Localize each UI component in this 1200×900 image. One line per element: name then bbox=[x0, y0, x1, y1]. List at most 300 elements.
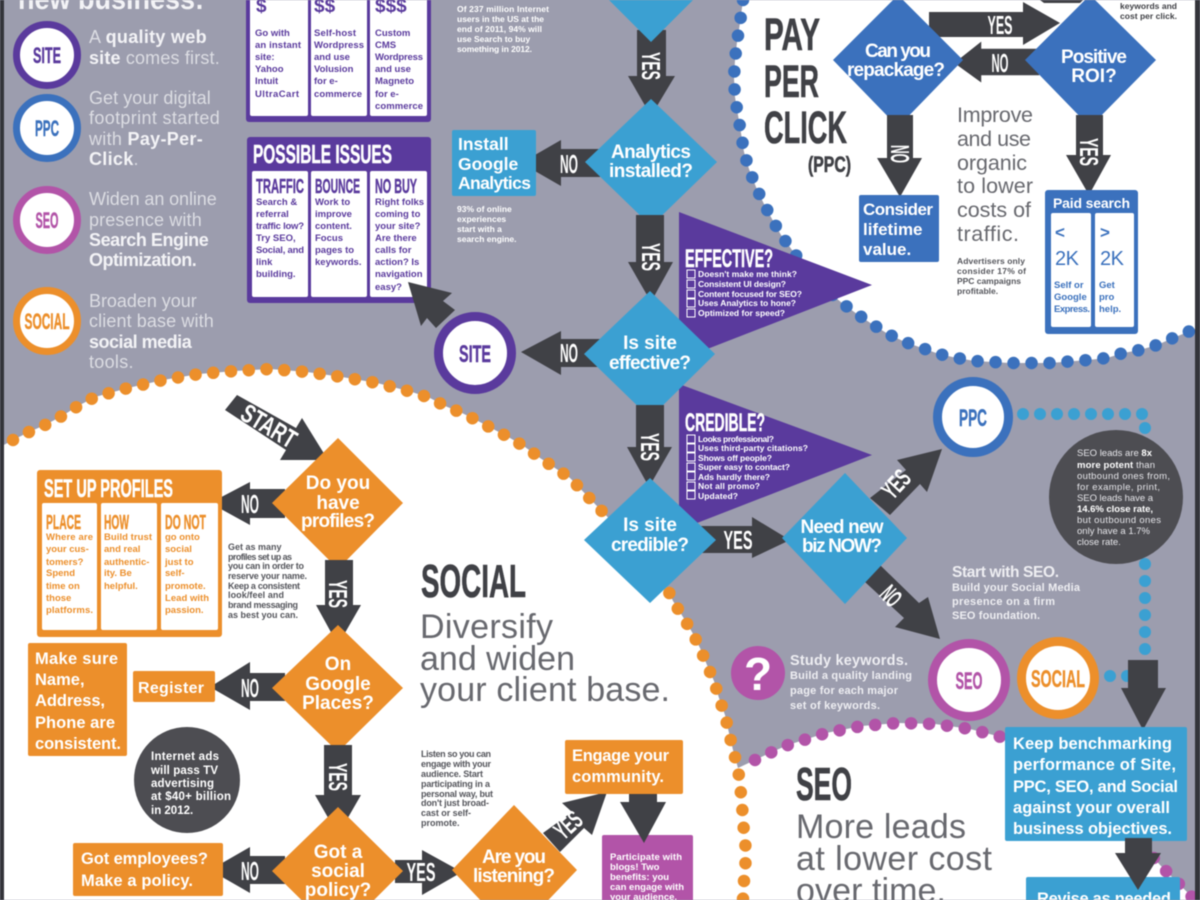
panel: pricing options: for e- bbox=[375, 89, 399, 100]
text: get as many profiles: brand messaging bbox=[228, 600, 298, 610]
panel: possible issues: TRAFFIC bbox=[256, 176, 304, 198]
page edge left bbox=[0, 0, 4, 900]
panel: set up profiles: platforms. bbox=[46, 605, 93, 616]
arrow: yes to google places bbox=[316, 560, 361, 645]
panel: effective checklist: Optimized for speed? bbox=[698, 308, 785, 318]
box: install google analytics bbox=[452, 130, 536, 196]
text: get as many profiles: look/feel and bbox=[228, 590, 284, 600]
panel: pricing options: CMS bbox=[375, 40, 396, 51]
text: advertisers stat: Advertisers only bbox=[957, 256, 1025, 266]
panel: set up profiles: Lead with bbox=[165, 593, 209, 604]
text: listen: promote. bbox=[421, 818, 460, 828]
panel: paid search: > bbox=[1100, 223, 1110, 242]
panel: possible issues: link bbox=[256, 257, 273, 268]
text: start with seo: SEO foundation. bbox=[952, 610, 1040, 622]
box: consider lifetime value: lifetime bbox=[863, 220, 923, 239]
panel: pricing options: and use bbox=[375, 64, 411, 75]
panel: pricing options: Yahoo bbox=[255, 64, 284, 75]
decision: got a social policy bbox=[272, 807, 403, 900]
text: listen: cast or self- bbox=[421, 808, 471, 818]
panel: set up profiles: HOW bbox=[104, 512, 129, 534]
panel: set up profiles: Build trust bbox=[104, 532, 153, 543]
circle: site: SITE bbox=[459, 341, 491, 368]
heading: social: SOCIAL bbox=[421, 555, 526, 607]
text: improve organic: traffic. bbox=[957, 222, 1019, 246]
panel: possible issues: Search & bbox=[256, 197, 297, 208]
panel: possible issues: navigation bbox=[375, 269, 423, 280]
decision: positive roi bbox=[1025, 0, 1156, 127]
panel: possible issues: Work to bbox=[315, 197, 350, 208]
legend: site bbox=[16, 24, 220, 86]
box: got employees: Make a policy. bbox=[81, 872, 193, 890]
page edge right bbox=[1195, 0, 1200, 900]
panel: possible issues: building. bbox=[256, 269, 296, 280]
text: get as many profiles: Get as many bbox=[228, 542, 282, 552]
text: advertisers stat bbox=[957, 256, 1026, 296]
panel: paid search: Paid search bbox=[1053, 195, 1130, 211]
text: listen: participating in a bbox=[421, 779, 491, 789]
legend: seo: Optimization. bbox=[89, 250, 197, 270]
box: make sure: Name, bbox=[35, 671, 85, 689]
box: participate with blogs bbox=[602, 835, 693, 900]
panel: possible issues: Social, and bbox=[256, 245, 304, 256]
panel: set up profiles: helpful. bbox=[104, 581, 138, 592]
decision: do you have profiles: profiles? bbox=[301, 511, 375, 532]
box: make sure: consistent. bbox=[35, 735, 121, 753]
decision: need new biz bbox=[782, 473, 907, 604]
text: get as many profiles bbox=[228, 542, 307, 620]
panel: set up profiles: DO NOT bbox=[165, 512, 206, 534]
panel: set up profiles: social bbox=[165, 544, 192, 555]
panel: pricing options: for e- bbox=[314, 76, 338, 87]
stat: search to buy bbox=[457, 4, 549, 54]
stat: search to buy: Of 237 million Internet bbox=[457, 4, 549, 14]
box: got employees bbox=[73, 843, 223, 896]
panel: possible issues: easy? bbox=[375, 282, 402, 293]
arrow: yes to analytics: YES bbox=[636, 52, 666, 80]
panel: paid search: < bbox=[1055, 223, 1065, 242]
decision: site credible bbox=[584, 478, 716, 603]
panel: possible issues: action? Is bbox=[375, 257, 419, 268]
heading: seo: More leads bbox=[796, 808, 966, 846]
panel: credible checklist: Shows off people? bbox=[698, 453, 772, 463]
panel: credible checklist: CREDIBLE? bbox=[685, 409, 765, 437]
text: study keywords: Study keywords. bbox=[790, 653, 908, 669]
box: install google analytics: Google bbox=[458, 154, 519, 174]
text: listen: audience. Start bbox=[421, 769, 483, 779]
panel: pricing options: Go with bbox=[255, 28, 290, 39]
panel: set up profiles: your cus- bbox=[46, 544, 89, 555]
arrow: yes to site effective: YES bbox=[636, 243, 666, 271]
decision: site effective: effective? bbox=[609, 353, 691, 374]
box: consider lifetime value bbox=[859, 195, 939, 262]
arrow: yes to site credible bbox=[627, 405, 672, 487]
stat: search engine: search engine. bbox=[457, 234, 517, 244]
arrow: yes to site effective bbox=[628, 215, 673, 302]
panel: paid search bbox=[1045, 190, 1138, 334]
decision: on google places bbox=[272, 625, 403, 752]
stat: search to buy: users in the US at the bbox=[457, 14, 544, 24]
stat circle: internet ads: will pass TV bbox=[150, 765, 218, 777]
dotted border: seo bbox=[755, 723, 1195, 900]
arrow: to revise bbox=[1115, 838, 1161, 890]
box: participate with blogs: Participate with bbox=[610, 852, 682, 863]
legend: seo bbox=[16, 189, 217, 270]
stat: search engine: 93% of online bbox=[457, 204, 512, 214]
box: make sure: Phone are bbox=[35, 714, 115, 732]
heading: social bbox=[420, 555, 670, 709]
arrow: no to site bbox=[521, 331, 600, 375]
panel: paid search: Get bbox=[1099, 280, 1116, 291]
panel: possible issues: Right folks bbox=[375, 197, 424, 208]
stat circle: seo leads bbox=[1049, 430, 1183, 564]
panel: set up profiles bbox=[37, 470, 222, 637]
box: got employees: Got employees? bbox=[81, 850, 208, 868]
heading: social: your client base. bbox=[420, 671, 670, 709]
text: get as many profiles: as best you can. bbox=[228, 610, 298, 620]
panel: pricing options: commerce bbox=[375, 101, 423, 112]
decision: top diamond bbox=[609, 0, 693, 42]
panel: pricing options: and use bbox=[314, 52, 350, 63]
text: start with seo bbox=[952, 564, 1081, 622]
panel: possible issues: POSSIBLE ISSUES bbox=[253, 139, 392, 169]
stat: search to buy: use Search to buy bbox=[457, 34, 530, 44]
circle: seo bbox=[932, 644, 1006, 716]
stat circle: seo leads: more potent than bbox=[1077, 460, 1155, 471]
legend: seo: SEO bbox=[36, 208, 58, 233]
arrow: yes to social policy bbox=[315, 745, 361, 835]
panel: pricing options: Self-host bbox=[314, 28, 357, 39]
panel: set up profiles: ity. Be bbox=[104, 568, 132, 579]
box: engage your community: Engage your bbox=[572, 747, 670, 765]
panel: set up profiles: time on bbox=[46, 581, 80, 592]
arrow: yes to need new biz bbox=[700, 517, 790, 558]
box: consider lifetime value: Consider bbox=[863, 200, 933, 219]
box: engage your community bbox=[565, 740, 683, 794]
legend: seo: presence with bbox=[89, 210, 202, 230]
stat circle: internet ads: Internet ads bbox=[151, 751, 219, 763]
box: participate with blogs: can engage with bbox=[610, 882, 684, 893]
panel: pricing options: Magneto bbox=[375, 76, 414, 87]
panel: effective checklist bbox=[679, 212, 872, 360]
arrow: yes to google places: YES bbox=[323, 580, 353, 608]
box: keep benchmarking bbox=[1005, 727, 1187, 841]
panel: pricing options: Wordpress bbox=[314, 40, 364, 51]
panel: effective checklist: Doesn't make me think? bbox=[698, 269, 797, 279]
panel: paid search: help. bbox=[1099, 304, 1121, 315]
arrow: yes to social policy: YES bbox=[323, 763, 353, 791]
box: keep benchmarking: performance of Site, bbox=[1013, 756, 1176, 774]
arrow: yes to listening: YES bbox=[406, 857, 436, 887]
panel: set up profiles: just to bbox=[164, 557, 194, 568]
arrow: no to site: NO bbox=[560, 338, 578, 368]
panel: set up profiles: passion. bbox=[165, 605, 204, 616]
heading: pay per click: (PPC) bbox=[808, 152, 851, 177]
text: study keywords: page for each major bbox=[790, 685, 899, 697]
panel: possible issues: your site? bbox=[375, 221, 421, 232]
heading: pay per click: PAY bbox=[764, 9, 820, 60]
panel: pricing options: Custom bbox=[375, 28, 410, 39]
text: advertisers stat: consider 17% of bbox=[957, 266, 1026, 276]
text: get as many profiles: Keep a consistent bbox=[228, 581, 300, 591]
panel: effective checklist: Consistent UI design? bbox=[698, 279, 786, 289]
panel: pay per click background bbox=[734, 0, 1195, 363]
text: top right note: keywords and bbox=[1120, 1, 1177, 11]
legend: site: A quality web bbox=[89, 27, 207, 47]
icon: question mark bbox=[731, 646, 785, 700]
text: start with seo: presence on a firm bbox=[952, 596, 1055, 608]
dotted border: ppc bbox=[734, 0, 1195, 363]
box: keep benchmarking: business objectives. bbox=[1013, 820, 1172, 838]
circle: ppc bbox=[938, 382, 1008, 452]
panel: possible issues: BOUNCE bbox=[315, 176, 360, 198]
text: listen: personal way, but bbox=[421, 789, 493, 799]
heading: social: Diversify bbox=[420, 608, 553, 646]
box: revise as needed bbox=[1026, 877, 1180, 900]
text: study keywords bbox=[790, 653, 912, 712]
legend: ppc: with Pay-Per- bbox=[88, 129, 203, 149]
legend: social: client base with bbox=[89, 311, 214, 331]
decision: analytics installed: Analytics bbox=[611, 142, 691, 163]
stat circle: internet ads: at $40+ billion bbox=[151, 791, 231, 803]
heading: pay per click: CLICK bbox=[764, 102, 847, 153]
decision: do you have profiles: have bbox=[316, 493, 360, 514]
panel: possible issues bbox=[247, 137, 431, 303]
text: improve organic: organic bbox=[957, 151, 1027, 175]
box: keep benchmarking: against your overall bbox=[1013, 799, 1170, 817]
decision: are you listening: listening? bbox=[473, 866, 555, 887]
panel: pricing options: commerce bbox=[314, 89, 362, 100]
circle: social bbox=[1022, 642, 1094, 714]
arrow: top right stub bbox=[1040, 0, 1083, 3]
panel: paid search: Google bbox=[1054, 292, 1087, 303]
legend: seo: Search Engine bbox=[89, 230, 209, 250]
legend: social: Broaden your bbox=[89, 291, 197, 311]
decision: on google places: Google bbox=[305, 674, 371, 695]
legend: seo: Widen an online bbox=[89, 189, 217, 209]
arrow: engage to blogs bbox=[620, 794, 666, 843]
panel: possible issues: traffic low? bbox=[256, 221, 304, 232]
panel: possible issues: Are there bbox=[375, 233, 417, 244]
stat: search to buy: end of 2011, 94% will bbox=[457, 24, 542, 34]
stat: search engine bbox=[457, 204, 517, 244]
arrow: no to register: NO bbox=[241, 673, 259, 703]
text: top right note: cost per click. bbox=[1120, 11, 1177, 21]
panel: pricing options: site: bbox=[255, 52, 275, 63]
decision: need new biz: biz NOW? bbox=[802, 536, 882, 557]
text: get as many profiles: you can in order to bbox=[228, 561, 304, 571]
stat: search engine: start with a bbox=[457, 224, 502, 234]
text: improve organic: costs of bbox=[957, 198, 1031, 222]
arrow: to benchmarking bbox=[1121, 660, 1166, 730]
panel: possible issues: improve bbox=[315, 209, 352, 220]
icon: question mark: ? bbox=[744, 648, 772, 700]
decision: site effective bbox=[584, 291, 715, 418]
text: improve organic bbox=[957, 103, 1033, 246]
panel: set up profiles: self- bbox=[165, 568, 185, 579]
panel: set up profiles: authentic- bbox=[104, 557, 149, 568]
decision: site credible: credible? bbox=[611, 535, 689, 556]
heading: social: and widen bbox=[420, 640, 575, 678]
arrow: yes to paid search: YES bbox=[1074, 138, 1104, 166]
arrow: yes to ppc: YES bbox=[875, 463, 917, 505]
circle: site bbox=[438, 316, 512, 390]
panel: credible checklist: Not all promo? bbox=[698, 481, 760, 491]
decision: got a social policy: social bbox=[311, 861, 365, 882]
dotted connector: social to benchmarking bbox=[1110, 670, 1130, 682]
panel: pricing options bbox=[246, 0, 431, 122]
box: make sure: Make sure bbox=[35, 650, 118, 668]
text: listen: Listen so you can bbox=[421, 749, 491, 759]
panel: possible issues: Focus bbox=[315, 233, 343, 244]
dotted connector: ppc to benchmarking bbox=[1023, 414, 1145, 660]
legend: site: site comes first. bbox=[89, 48, 220, 68]
box: make sure: Address, bbox=[35, 692, 105, 710]
box: make sure bbox=[28, 643, 127, 756]
stat circle: seo leads: SEO leads are 8x bbox=[1077, 448, 1153, 459]
panel: set up profiles: promote. bbox=[165, 581, 206, 592]
circle: seo: SEO bbox=[956, 668, 982, 695]
circle: ppc: PPC bbox=[959, 405, 987, 432]
stat circle: seo leads: 14.6% close rate, bbox=[1077, 504, 1153, 515]
decision: site credible: Is site bbox=[623, 515, 677, 536]
panel: set up profiles: Where are bbox=[46, 532, 93, 543]
box: keep benchmarking: Keep benchmarking bbox=[1013, 735, 1172, 753]
arrow: no to seo: NO bbox=[874, 579, 908, 613]
box: register bbox=[133, 671, 215, 702]
text: listen bbox=[421, 749, 493, 828]
stat circle: seo leads: but outbound ones bbox=[1077, 515, 1161, 526]
box: register: Register bbox=[138, 680, 204, 697]
decision: can you repackage: Can you bbox=[865, 41, 931, 62]
arrow: no to register bbox=[210, 662, 285, 710]
arrow: no to repackage bbox=[953, 40, 1040, 84]
text: listen: don't just broad- bbox=[421, 798, 489, 808]
panel: credible checklist: Updated? bbox=[698, 491, 738, 501]
legend: ppc: Get your digital bbox=[89, 88, 211, 108]
stat: search to buy: something in 2012. bbox=[457, 44, 532, 54]
box: engage your community: community. bbox=[572, 768, 664, 786]
panel: possible issues: NO BUY bbox=[375, 176, 417, 198]
box: consider lifetime value: value. bbox=[863, 240, 911, 259]
arrow: yes to positive roi: YES bbox=[988, 10, 1012, 40]
panel: possible issues: pages to bbox=[315, 245, 354, 256]
decision: are you listening bbox=[452, 805, 577, 900]
legend: social: SOCIAL bbox=[24, 309, 70, 334]
decision: positive roi: ROI? bbox=[1071, 66, 1117, 87]
panel: credible checklist: Looks professional? bbox=[698, 434, 774, 444]
stat circle: seo leads: close rate. bbox=[1077, 537, 1121, 548]
panel: set up profiles: SET UP PROFILES bbox=[44, 475, 173, 503]
text: get as many profiles: profiles set up as bbox=[228, 552, 292, 562]
panel: pricing options: Wordpress bbox=[375, 52, 423, 63]
box: participate with blogs: blogs! Two bbox=[610, 862, 660, 873]
arrow: yes to paid search bbox=[1066, 115, 1111, 195]
decision: site effective: Is site bbox=[623, 333, 677, 354]
text: advertisers stat: PPC campaigns bbox=[957, 276, 1021, 286]
panel: social background bbox=[0, 369, 900, 900]
arrow: no to seo bbox=[865, 565, 940, 639]
decision: need new biz: Need new bbox=[800, 517, 884, 538]
text: improve organic: Improve bbox=[957, 103, 1033, 127]
box: keep benchmarking: PPC, SEO, and Social bbox=[1013, 778, 1178, 796]
arrow: yes to engage: YES bbox=[548, 804, 588, 846]
panel: possible issues: keywords. bbox=[315, 257, 361, 268]
box: install google analytics: Install bbox=[458, 134, 509, 154]
panel: pricing options: Volusion bbox=[314, 64, 354, 75]
decision: on google places: On bbox=[325, 654, 351, 675]
stat circle: internet ads bbox=[134, 727, 240, 833]
panel: paid search: 2K bbox=[1100, 248, 1125, 270]
panel: possible issues: content. bbox=[315, 221, 352, 232]
panel: effective checklist: EFFECTIVE? bbox=[685, 245, 773, 273]
text: get as many profiles: reserve your name. bbox=[228, 571, 307, 581]
arrow: no to got employees bbox=[210, 847, 285, 893]
panel: set up profiles: those bbox=[46, 593, 71, 604]
text: improve organic: and use bbox=[957, 127, 1031, 151]
heading: pay per click: PER bbox=[764, 56, 819, 107]
text: top right note bbox=[1120, 1, 1177, 21]
arrow: yes to positive roi bbox=[929, 2, 1060, 45]
arrow: no to install analytics: NO bbox=[560, 149, 578, 179]
arrow: yes to listening bbox=[395, 850, 462, 895]
text: study keywords: set of keywords. bbox=[790, 700, 880, 712]
heading: seo bbox=[796, 758, 993, 900]
dotted border: social bbox=[13, 369, 746, 900]
panel: paid search: Self or bbox=[1054, 280, 1084, 291]
stat circle: seo leads: for example, print, bbox=[1077, 482, 1160, 493]
legend: ppc: Click. bbox=[89, 149, 139, 169]
heading: seo: at lower cost bbox=[796, 840, 993, 878]
decision: got a social policy: Got a bbox=[314, 842, 363, 863]
decision: on google places: Places? bbox=[302, 693, 374, 714]
text: improve organic: to lower bbox=[957, 174, 1033, 198]
panel: effective checklist: Content focused for SEO? bbox=[698, 289, 802, 299]
panel: set up profiles: go onto bbox=[165, 532, 200, 543]
arrow: no to lifetime value bbox=[877, 115, 922, 197]
decision: do you have profiles bbox=[272, 438, 403, 569]
panel: credible checklist: Super easy to contact? bbox=[698, 462, 790, 472]
text: listen: engage with your bbox=[421, 759, 491, 769]
arrow: no to set up profiles: NO bbox=[241, 489, 259, 519]
heading: seo: SEO bbox=[796, 758, 852, 810]
panel: paid search: pro bbox=[1099, 292, 1114, 303]
arrow: no to install analytics bbox=[521, 140, 600, 186]
decision: are you listening: Are you bbox=[482, 847, 546, 868]
text: start with seo: Build your Social Media bbox=[952, 582, 1081, 594]
decision: analytics installed: installed? bbox=[609, 161, 693, 182]
legend: social bbox=[16, 290, 214, 372]
text: study keywords: Build a quality landing bbox=[790, 670, 912, 682]
arrow: no to lifetime value: NO bbox=[885, 145, 915, 163]
panel: set up profiles: PLACE bbox=[46, 512, 81, 534]
panel: set up profiles: Spend bbox=[46, 568, 75, 579]
panel: set up profiles: tomers? bbox=[46, 557, 84, 568]
panel: paid search: Express. bbox=[1054, 304, 1090, 315]
arrow: no to repackage: NO bbox=[992, 48, 1008, 78]
panel: possible issues: referral bbox=[256, 209, 289, 220]
legend: site: SITE bbox=[33, 43, 61, 68]
heading: pay per click bbox=[764, 9, 851, 177]
circle: social: SOCIAL bbox=[1031, 666, 1085, 693]
panel: paid search: 2K bbox=[1055, 248, 1080, 270]
legend: social: social media bbox=[89, 332, 193, 352]
panel: possible issues: calls for bbox=[375, 245, 412, 256]
arrow: start: START bbox=[236, 398, 303, 454]
arrow: yes to ppc bbox=[870, 449, 942, 515]
panel: seo background bbox=[738, 723, 1195, 900]
legend: ppc: footprint started bbox=[89, 108, 220, 128]
